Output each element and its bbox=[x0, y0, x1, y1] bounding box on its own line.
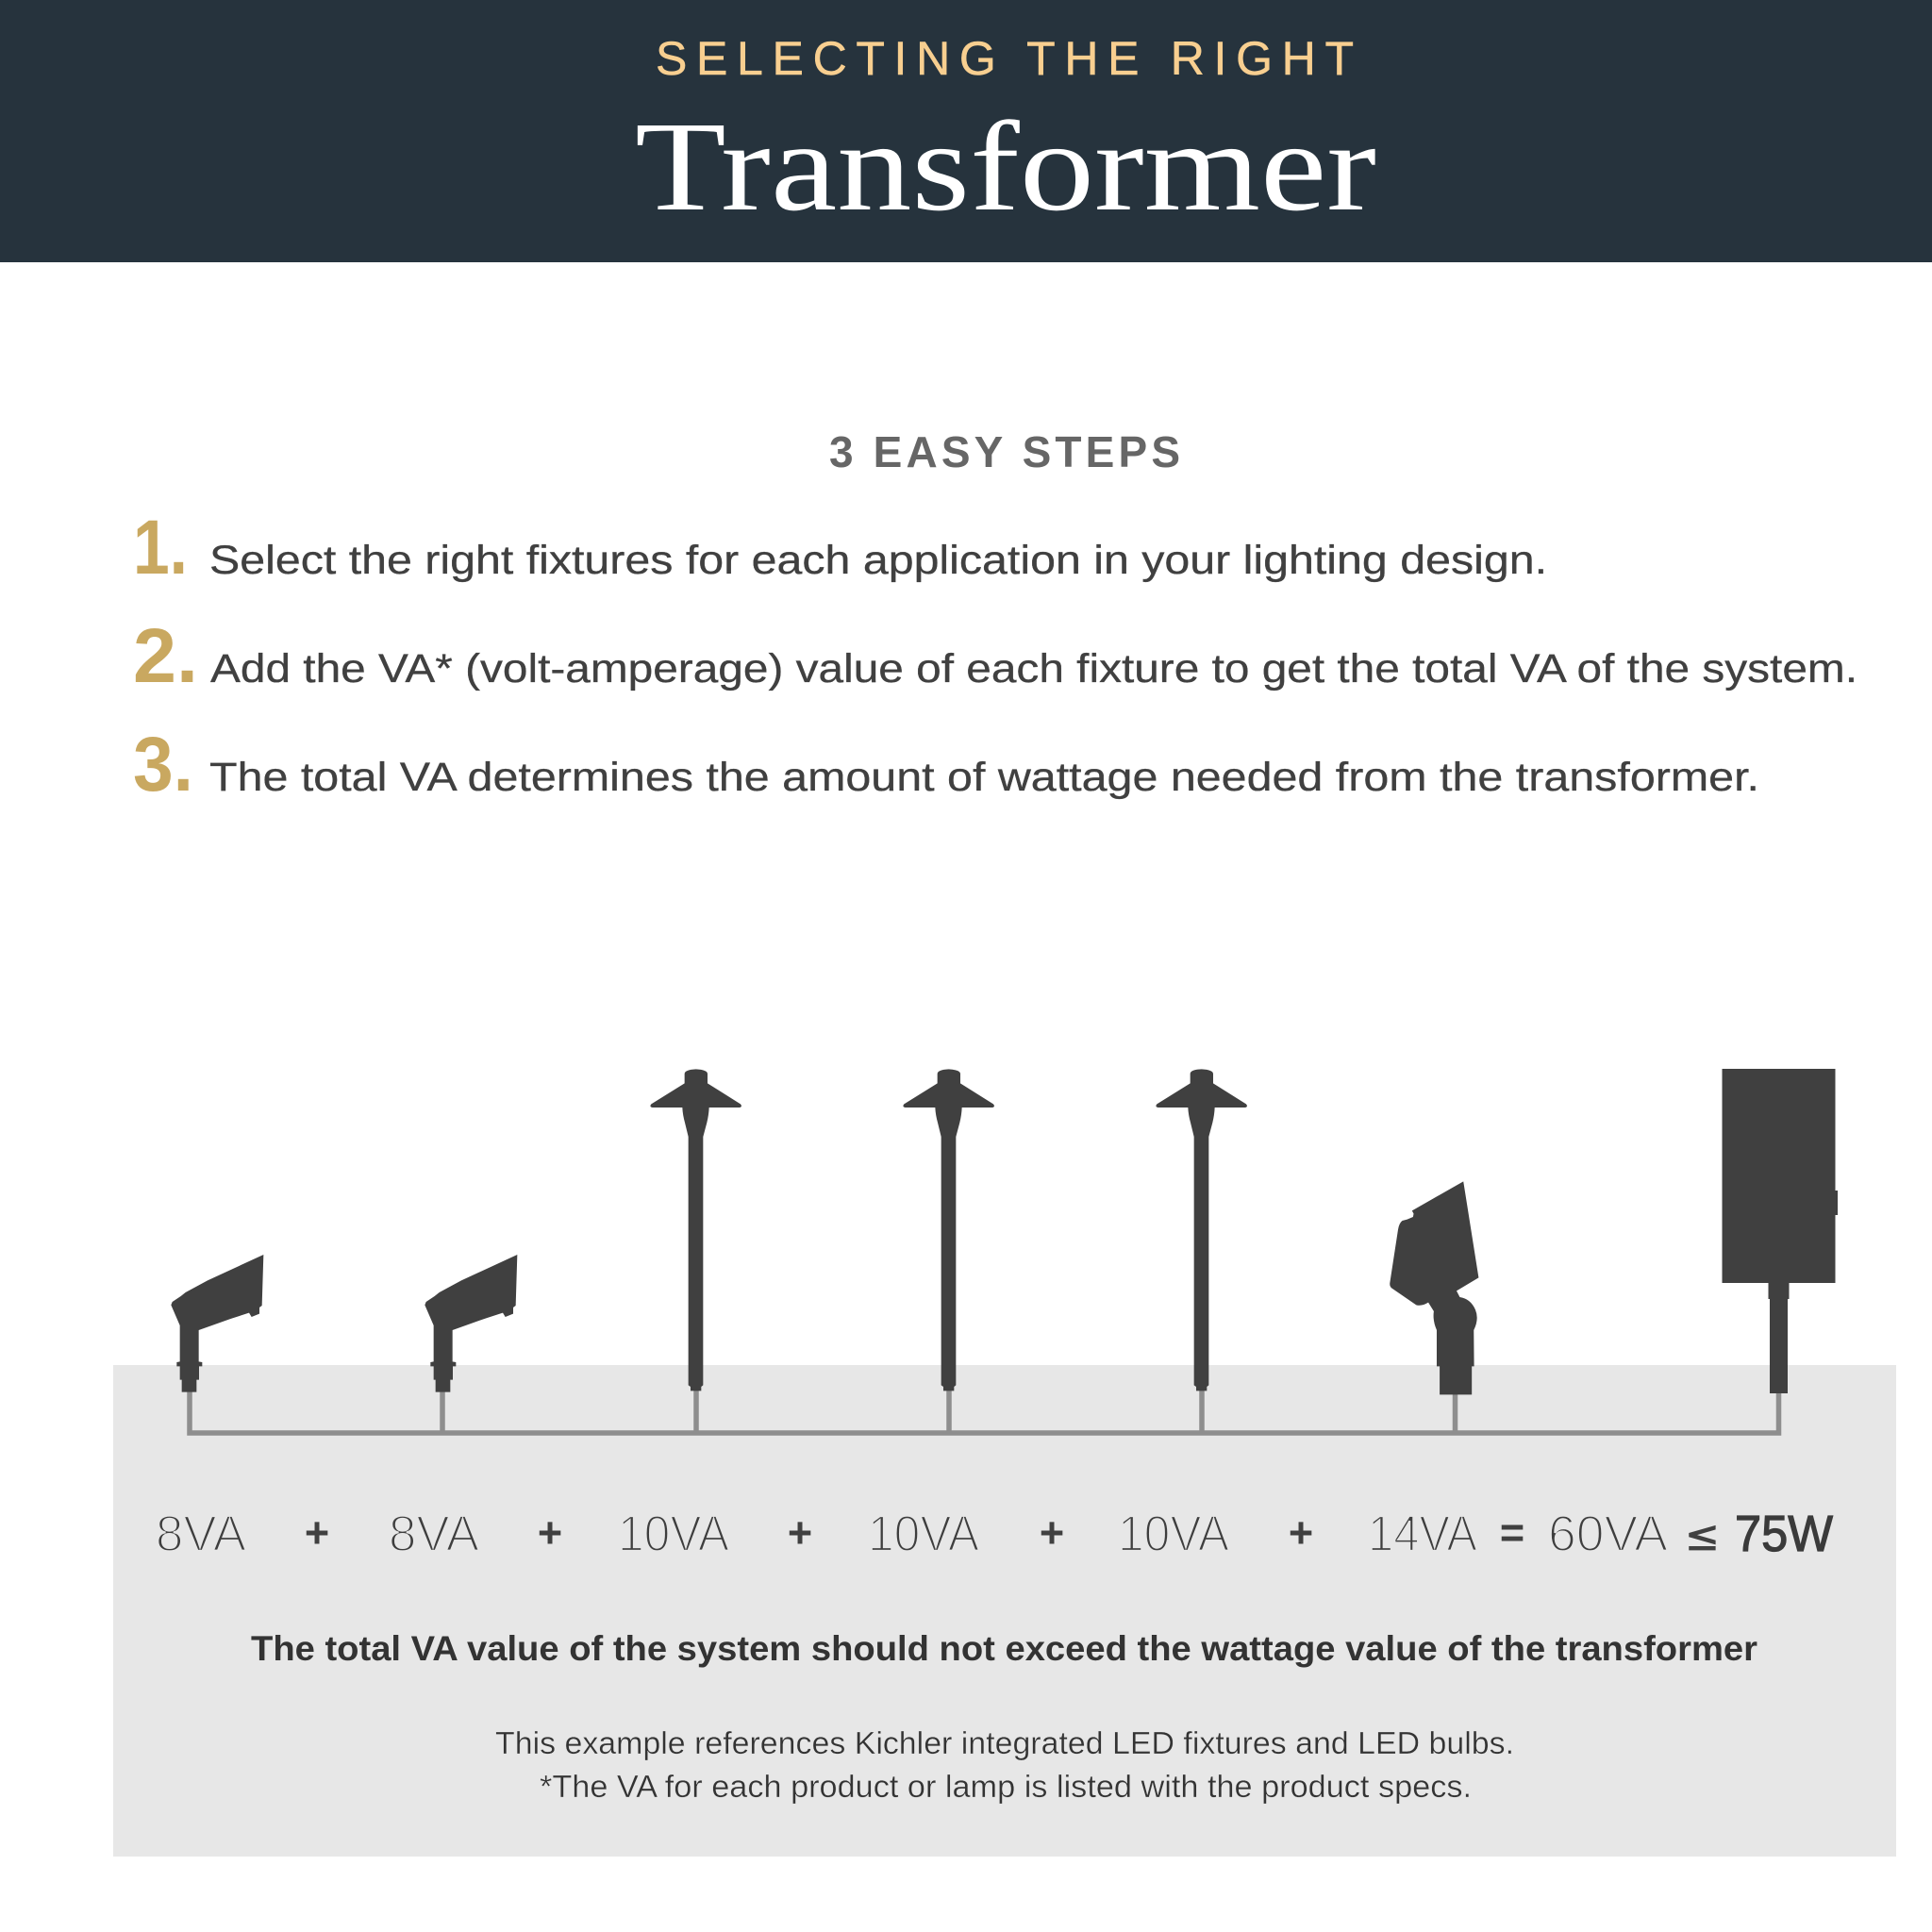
footnote: This example references Kichler integrated LED fixtures and LED bulbs. bbox=[495, 1725, 1514, 1760]
value: 14VA: 14VA bbox=[1368, 1506, 1477, 1562]
step 2: Add the VA* (volt-amperage) value of each fixture to get the total VA of the system. bbox=[210, 646, 1857, 691]
header band bbox=[0, 0, 1932, 262]
operator: equals: = bbox=[1500, 1508, 1524, 1557]
step 3: 3. bbox=[133, 722, 193, 808]
steps list bbox=[133, 505, 1857, 808]
footnote: *The VA for each product or lamp is listed with the product specs. bbox=[540, 1769, 1472, 1804]
icon: transformer box bbox=[1723, 1069, 1838, 1393]
operator: plus: + bbox=[788, 1508, 812, 1557]
value: 10VA: 10VA bbox=[1118, 1506, 1229, 1562]
operator: plus: + bbox=[305, 1508, 329, 1557]
step 1 bbox=[133, 505, 1547, 591]
kicker: selecting the right: SELECTING THE RIGHT bbox=[656, 32, 1354, 85]
icon: path light 3 bbox=[1156, 1069, 1247, 1391]
icon: path light 2 bbox=[903, 1069, 994, 1391]
value: 10VA: 10VA bbox=[868, 1506, 979, 1562]
value: 75W: 75W bbox=[1735, 1506, 1833, 1562]
icon: path light 1 bbox=[650, 1069, 741, 1391]
value: 60VA: 60VA bbox=[1548, 1506, 1668, 1562]
value: 8VA: 8VA bbox=[156, 1506, 246, 1562]
heading: 3 easy steps: 3 EASY STEPS bbox=[829, 427, 1180, 476]
step 1: Select the right fixtures for each application in your lighting design. bbox=[209, 538, 1547, 583]
step 3: The total VA determines the amount of wattage needed from the transformer. bbox=[209, 755, 1759, 800]
icon: flood light bbox=[1390, 1181, 1478, 1394]
operator: plus: + bbox=[538, 1508, 562, 1557]
step 2: 2. bbox=[133, 613, 198, 699]
value: 8VA: 8VA bbox=[389, 1506, 479, 1562]
operator: plus: + bbox=[1040, 1508, 1064, 1557]
operator: plus: + bbox=[1289, 1508, 1313, 1557]
ground panel bbox=[113, 1365, 1896, 1857]
title: transformer: Transformer bbox=[635, 96, 1376, 238]
footnote bbox=[495, 1725, 1514, 1804]
icon: spot light 1 bbox=[171, 1255, 263, 1392]
step 3 bbox=[133, 722, 1759, 808]
equation row bbox=[156, 1506, 1833, 1562]
step 1: 1. bbox=[133, 505, 188, 591]
operator: less or equal: ≤ bbox=[1685, 1512, 1720, 1560]
wiring bbox=[190, 1377, 1779, 1433]
rule statement: The total VA value of the system should not exceed the wattage value of the transformer bbox=[251, 1629, 1757, 1668]
icon: spot light 2 bbox=[425, 1255, 517, 1392]
value: 10VA: 10VA bbox=[618, 1506, 729, 1562]
step 2 bbox=[133, 613, 1857, 699]
